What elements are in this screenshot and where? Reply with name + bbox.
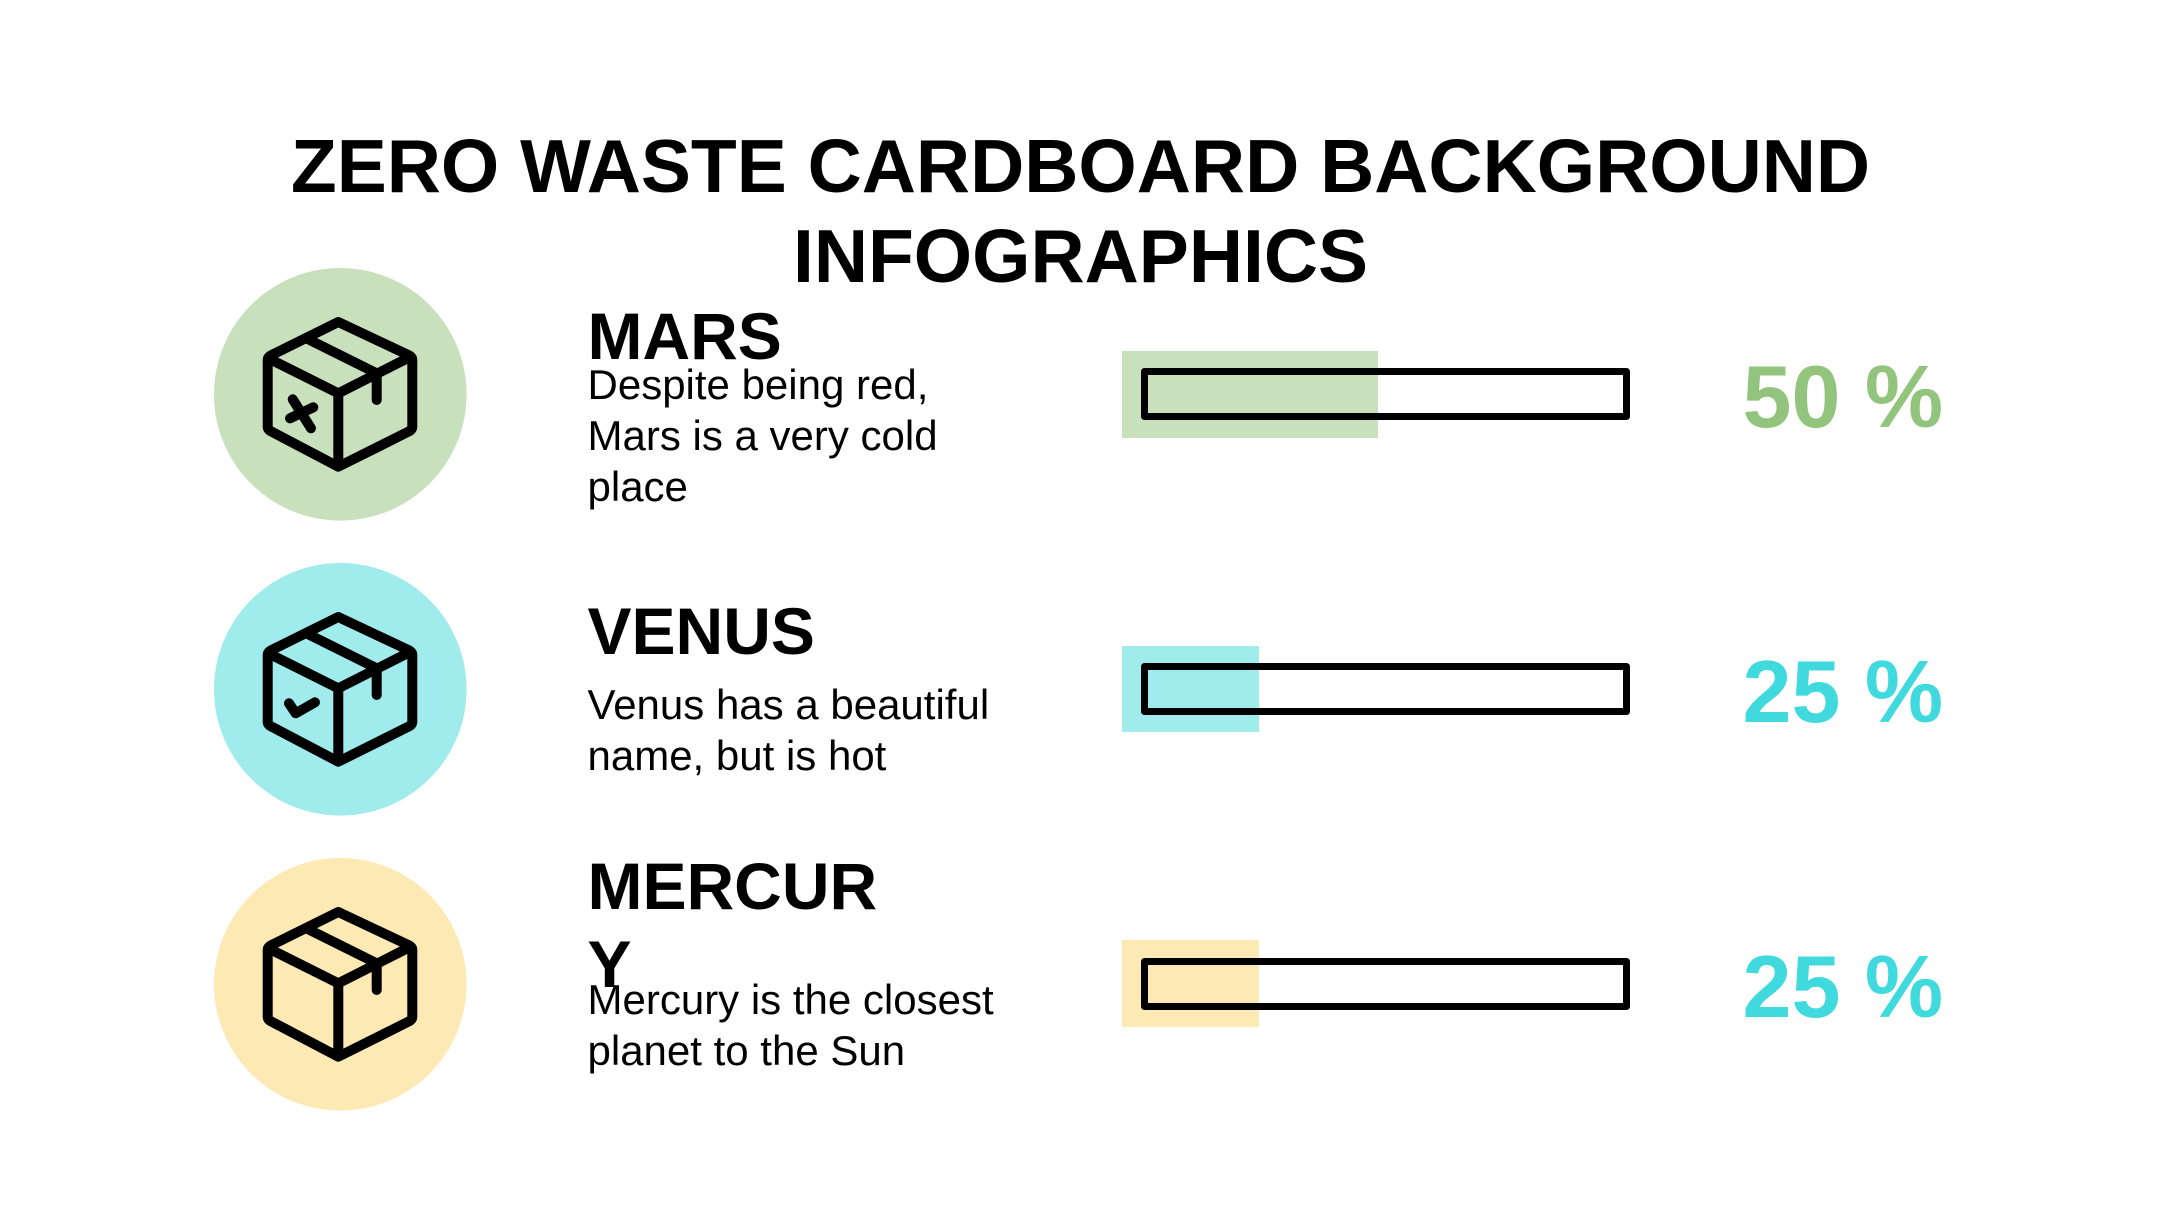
icon: cardboard box on yellow circle: [214, 858, 467, 1111]
title: ZERO WASTE CARDBOARD BACKGROUND: [291, 124, 1870, 208]
heading: Mercury: Y: [588, 927, 632, 1001]
row: Mars: [214, 268, 1943, 521]
value: 50 percent: 50 %: [1742, 346, 1943, 446]
row: Venus: [214, 563, 1943, 816]
text: Venus description: Venus has a beautiful: [588, 680, 989, 728]
text: Mars description: Despite being red,: [588, 361, 928, 408]
icon: cardboard box with check on cyan circle: [214, 563, 467, 816]
progress bar: Venus 25 percent: [1122, 646, 1630, 732]
heading: Mercury: MERCUR: [588, 849, 877, 923]
progress bar: Mercury 25 percent: [1122, 940, 1630, 1027]
value: 25 percent: 25 %: [1742, 936, 1943, 1036]
text: Mars description: place: [588, 463, 688, 510]
text: Mars description: [588, 361, 938, 510]
text: Venus description: name, but is hot: [588, 732, 886, 778]
icon: cardboard box with x on green circle: [214, 268, 467, 521]
heading: Mercury: [588, 849, 877, 1001]
text: Venus description: [588, 680, 989, 778]
row: Mercury: [214, 849, 1943, 1111]
progress bar: Mars 50 percent: [1122, 351, 1630, 438]
title: [291, 124, 1870, 298]
text: Mercury description: planet to the Sun: [588, 1026, 905, 1074]
text: Mercury description: Mercury is the closest: [588, 976, 994, 1022]
value: 25 percent: 25 %: [1742, 642, 1943, 740]
text: Mars description: Mars is a very cold: [588, 412, 938, 459]
heading: Mars: MARS: [588, 299, 782, 373]
title: INFOGRAPHICS: [793, 214, 1368, 298]
text: Mercury description: [588, 976, 994, 1074]
heading: Venus: VENUS: [588, 594, 815, 668]
